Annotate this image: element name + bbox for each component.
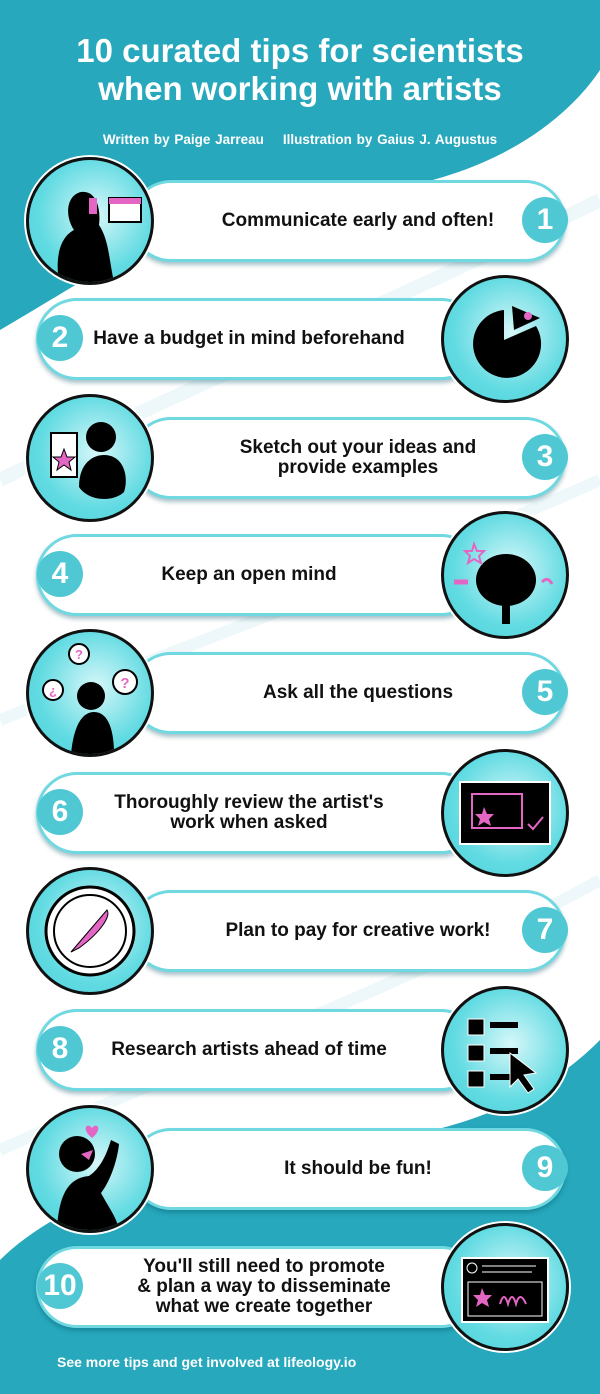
tip 4: 4	[52, 557, 68, 590]
tip 5: Ask all the questions	[263, 682, 453, 703]
tip 2: Have a budget in mind beforehand	[93, 328, 405, 349]
icon: coin with feather	[26, 867, 154, 995]
tip 2	[34, 275, 569, 403]
icon: website	[441, 1223, 569, 1351]
tip 4	[34, 510, 569, 639]
icon: artist list with cursor	[441, 986, 569, 1114]
icon: phone person with calendar	[26, 157, 154, 285]
tip 8: Research artists ahead of time	[111, 1039, 387, 1060]
tip 4: Keep an open mind	[161, 564, 337, 585]
icon: sketch	[26, 394, 154, 522]
title	[76, 32, 524, 107]
icon: questions	[26, 629, 154, 757]
icon: pie chart	[441, 275, 569, 403]
tip 7: Plan to pay for creative work!	[225, 920, 491, 941]
tip 3: provide examples	[278, 457, 438, 478]
icon: questions: ?	[120, 675, 130, 692]
title: 10 curated tips for scientists	[76, 32, 524, 69]
tip 3: Sketch out your ideas and	[240, 437, 476, 458]
tip 6: 6	[52, 795, 68, 828]
tip 9	[26, 1103, 568, 1235]
icon: brain	[441, 511, 569, 639]
tip 3: 3	[537, 440, 553, 473]
tip 9: It should be fun!	[284, 1158, 432, 1179]
tip 6: work when asked	[170, 812, 328, 833]
tip 1: 1	[537, 203, 553, 236]
tip 1: Communicate early and often!	[222, 210, 494, 231]
tip 6	[34, 749, 569, 877]
tip 6: Thoroughly review the artist's	[114, 792, 384, 813]
tip 10: what we create together	[156, 1296, 372, 1317]
tip 5: 5	[537, 675, 553, 708]
tip 1	[24, 155, 568, 286]
tip 9: 9	[537, 1151, 553, 1184]
icon: happy person	[26, 1105, 154, 1233]
tip 5	[25, 629, 568, 757]
tip 10	[34, 1221, 571, 1353]
byline: Written by Paige Jarreau Illustration by Gaius J. Augustus	[103, 132, 497, 147]
tip 10: 10	[43, 1269, 77, 1302]
tip 7: 7	[537, 913, 553, 946]
tip 8	[34, 986, 569, 1116]
tip 8: 8	[52, 1032, 68, 1065]
icon: screen review	[441, 749, 569, 877]
title: when working with artists	[98, 70, 502, 107]
icon: questions: ?	[75, 647, 83, 662]
footer: See more tips and get involved at lifeology.io	[57, 1354, 356, 1370]
icon: questions: ¿	[49, 683, 57, 698]
tip 7	[26, 867, 568, 995]
tip 2: 2	[52, 321, 68, 354]
tip 3	[24, 394, 568, 522]
tip 10: & plan a way to disseminate	[137, 1276, 391, 1297]
tip 10: You'll still need to promote	[143, 1256, 385, 1277]
